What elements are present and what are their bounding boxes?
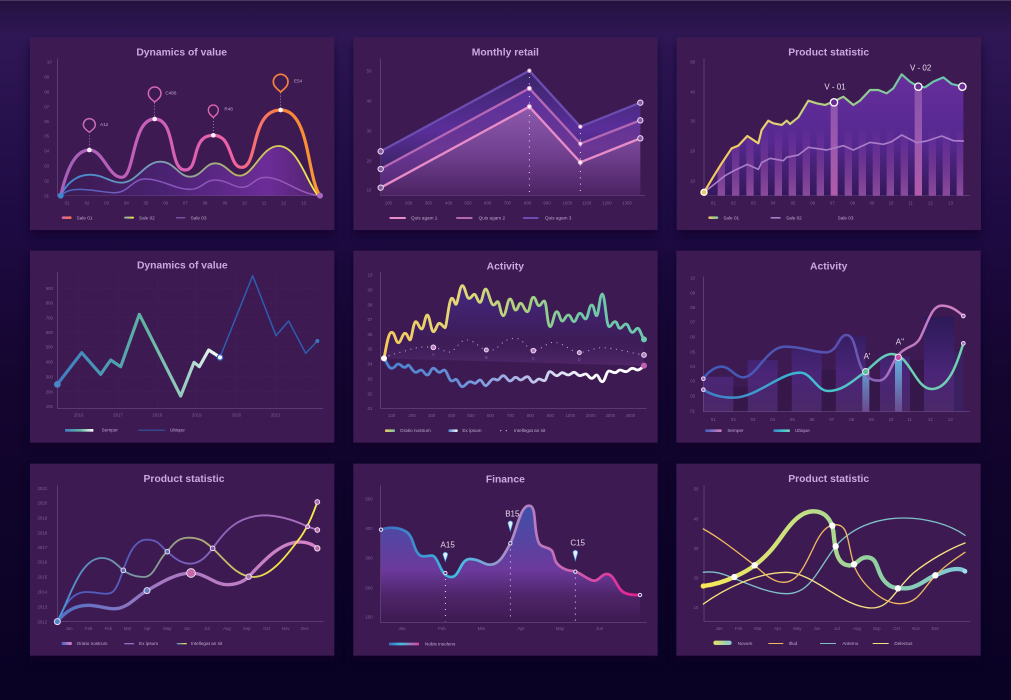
pin A12: A12 <box>100 122 109 127</box>
axes: 06 <box>690 334 696 339</box>
axes: 2020 <box>38 501 48 506</box>
callouts: C15 <box>570 538 586 547</box>
axes <box>690 275 970 422</box>
legend <box>65 428 185 433</box>
legend: Intellegat an sit <box>514 428 546 433</box>
legend: Ex ipsum <box>462 428 482 433</box>
point labels: D <box>578 357 581 362</box>
axes: 40 <box>367 99 372 104</box>
panel: product statistic, curves <box>30 464 334 661</box>
pin E54 <box>273 74 303 112</box>
axes: 12 <box>928 201 933 206</box>
line: intellegat an sit <box>57 502 317 622</box>
axes: Jan <box>66 626 73 631</box>
axes: 800 <box>527 413 535 418</box>
markers <box>54 500 320 625</box>
point labels: C <box>532 356 535 361</box>
axes: 11 <box>908 201 914 206</box>
legend: Intellegat an sit <box>191 641 223 646</box>
axes: Mar <box>124 626 132 631</box>
axes: 600 <box>487 413 495 418</box>
axes: 06 <box>810 201 816 206</box>
axes: 13 <box>948 201 954 206</box>
panel: activity, waves <box>353 251 658 448</box>
callouts <box>441 509 586 549</box>
legend: Sale 01 <box>77 215 93 220</box>
band: series 2 <box>381 88 640 188</box>
legend: Quis agam 2 <box>479 215 505 220</box>
bars <box>703 317 963 412</box>
legend: Ex ipsum <box>139 641 158 646</box>
axes: 10 <box>889 201 894 206</box>
line: sale 02 <box>61 146 318 196</box>
axes: 10 <box>367 188 372 193</box>
legend: Sale 02 <box>786 215 802 220</box>
band: series 3 <box>381 71 640 169</box>
axes: 100 <box>365 615 373 620</box>
axes: 02 <box>690 394 696 399</box>
axes: 13 <box>301 201 307 206</box>
legend: Novum <box>738 641 753 646</box>
axes: 08 <box>690 305 696 310</box>
axes: 01 <box>65 201 70 206</box>
axes: 01 <box>711 417 716 422</box>
axes: 800 <box>46 301 54 306</box>
axes: 10 <box>368 273 373 278</box>
axes: Apr <box>774 626 782 631</box>
line: ubique <box>703 343 963 398</box>
axes: Sep <box>243 626 251 631</box>
heading: Activity <box>810 261 848 272</box>
axes: Aug <box>223 626 231 631</box>
axes: 06 <box>810 417 815 422</box>
legend: Quis agam 3 <box>545 215 572 220</box>
axes: 400 <box>448 413 456 418</box>
axes <box>44 58 322 206</box>
axes: 04 <box>770 417 776 422</box>
legend <box>385 428 546 433</box>
line: antemo <box>703 518 965 594</box>
area chart fill <box>381 506 640 622</box>
legend <box>389 215 572 220</box>
axes: 200 <box>46 389 54 394</box>
axes: 600 <box>46 330 54 335</box>
axes: 12 <box>928 417 933 422</box>
dotted line: intellegat an sit <box>384 338 644 358</box>
markers <box>381 336 647 369</box>
line: ex ipsum <box>57 515 317 622</box>
axes: 03 <box>44 164 50 169</box>
heading: Activity <box>487 261 524 272</box>
axes: 300 <box>365 556 373 561</box>
legend: Ubique <box>170 428 185 433</box>
legend <box>708 215 854 220</box>
legend: Antemo <box>842 641 859 646</box>
axes: 07 <box>829 417 835 422</box>
axes: 08 <box>849 417 855 422</box>
axes: Oct <box>893 626 901 631</box>
axes: 05 <box>790 417 795 422</box>
callouts: A' <box>864 352 871 361</box>
legend: Illud <box>789 641 798 646</box>
axes: 02 <box>44 178 50 183</box>
axes: 2016 <box>38 560 48 565</box>
axes: Jan <box>399 626 406 631</box>
dotted drop lines <box>445 543 575 621</box>
axes: 100 <box>46 404 54 409</box>
panel: product statistic, bars <box>677 37 981 237</box>
axes: 400 <box>46 360 54 365</box>
dotted drop lines <box>529 71 580 194</box>
axes: 700 <box>507 413 515 418</box>
axes: 50 <box>690 59 696 64</box>
heading: Product statistic <box>788 474 869 485</box>
axes: 11 <box>262 201 267 206</box>
line: quis agam 3 <box>381 71 640 151</box>
axes: 100 <box>385 201 393 206</box>
area under sale 02 <box>61 146 318 196</box>
markers <box>701 83 966 195</box>
line: sale 01 <box>61 110 320 196</box>
axes: 30 <box>367 129 372 134</box>
legend <box>389 641 456 646</box>
axes: 01 <box>368 406 373 411</box>
axes: 500 <box>464 201 472 206</box>
axes: Mar <box>478 626 486 631</box>
line: semper <box>57 314 220 396</box>
axes: 06 <box>163 201 169 206</box>
axes <box>368 272 647 418</box>
axes: 600 <box>484 201 492 206</box>
markers <box>701 314 965 391</box>
axes: Jun <box>184 626 191 631</box>
point labels: B <box>485 355 488 360</box>
area between lines <box>384 286 644 366</box>
axes: 2018 <box>38 530 48 535</box>
axes: 900 <box>46 286 54 291</box>
axes: 500 <box>467 413 475 418</box>
callouts: B15 <box>505 509 520 518</box>
axes: Jul <box>204 626 210 631</box>
panel: dynamics of value, line <box>30 251 334 448</box>
axes: May <box>793 626 802 631</box>
axes: 04 <box>124 201 129 206</box>
axes: May <box>163 626 172 631</box>
callouts <box>824 64 932 92</box>
axes: May <box>556 626 565 631</box>
axes <box>46 272 323 417</box>
callouts: V - 02 <box>910 64 932 73</box>
markers <box>701 522 967 591</box>
axes: 400 <box>445 201 453 206</box>
panel: product statistic, thick curve <box>676 464 981 661</box>
axes: 07 <box>183 201 188 206</box>
axes: Jan <box>716 626 723 631</box>
axes: 40 <box>690 89 696 94</box>
line: delectus <box>703 543 965 608</box>
axes: 900 <box>547 413 555 418</box>
axes: 2012 <box>38 619 48 624</box>
legend: Sale 01 <box>723 215 740 220</box>
markers <box>378 69 643 190</box>
axes: 04 <box>690 364 696 369</box>
panel: activity, bars <box>676 251 981 448</box>
legend <box>62 215 207 220</box>
line: illud <box>703 525 965 604</box>
axes: 07 <box>44 104 50 109</box>
legend: Sale 03 <box>191 215 207 220</box>
axes: 40 <box>694 516 699 521</box>
axes: 09 <box>223 201 228 206</box>
axes: Nov <box>912 626 921 631</box>
axes: Mar <box>754 626 762 631</box>
callouts <box>864 338 905 361</box>
axes: 400 <box>365 526 373 531</box>
axes: Jul <box>834 626 840 631</box>
axes: 08 <box>203 201 208 206</box>
axes: 05 <box>368 347 373 352</box>
heading: Dynamics of value <box>137 261 228 272</box>
axes: Dec <box>301 626 310 631</box>
axes: 4000 <box>626 413 636 418</box>
axes: 10 <box>690 178 696 183</box>
axes: Nov <box>282 626 290 631</box>
axes: 02 <box>85 201 90 206</box>
point labels <box>432 352 581 362</box>
axes: 06 <box>368 332 373 337</box>
legend: Sale 02 <box>139 215 155 220</box>
axes: 20 <box>690 148 696 153</box>
axes: 08 <box>44 89 50 94</box>
axes: Sep <box>873 626 881 631</box>
axes: 1300 <box>622 201 632 206</box>
axes: 10 <box>242 201 247 206</box>
line: oratio nostrum <box>57 542 317 622</box>
axes: 2013 <box>38 604 48 609</box>
axes: 200 <box>408 413 416 418</box>
axes <box>367 58 645 206</box>
axes: 2015 <box>38 575 48 580</box>
axes: 2014 <box>38 590 48 595</box>
pins <box>443 521 578 561</box>
axes <box>38 485 323 631</box>
pin A12 <box>83 119 109 152</box>
axes: 12 <box>281 201 287 206</box>
axes: 300 <box>428 413 436 418</box>
area under main line <box>704 74 963 196</box>
line: sale 02 <box>704 135 963 192</box>
callouts: A15 <box>441 540 455 549</box>
axes: 2017 <box>113 412 123 417</box>
axes: 02 <box>731 201 736 206</box>
axes: 11 <box>907 417 913 422</box>
axes: 500 <box>46 344 54 349</box>
end markers <box>58 193 323 199</box>
axes: 02 <box>731 417 736 422</box>
axes: 30 <box>694 546 699 551</box>
legend: Delectus <box>894 641 913 646</box>
axes: 09 <box>368 288 373 293</box>
axes: 09 <box>869 417 874 422</box>
axes: 300 <box>425 201 433 206</box>
axes: 700 <box>46 315 54 320</box>
axes <box>365 485 647 631</box>
legend: Quis agam 1 <box>411 215 438 220</box>
axes: 05 <box>791 201 796 206</box>
axes: 2019 <box>192 412 202 417</box>
axes: 2021 <box>38 486 48 491</box>
axes: 09 <box>44 74 50 79</box>
axes: 10 <box>889 417 894 422</box>
line: quis agam 2 <box>381 88 640 169</box>
legend <box>62 641 223 646</box>
axes: 03 <box>751 417 756 422</box>
axes: 100 <box>388 413 396 418</box>
highlight bars <box>862 357 902 412</box>
line: sale 03 <box>61 177 320 196</box>
axes: 1200 <box>602 201 612 206</box>
panel: dynamics of value, pins <box>30 37 334 237</box>
axes: 1000 <box>563 201 573 206</box>
legend: Oratio nostrum <box>400 428 431 433</box>
legend: Ubique <box>795 428 810 433</box>
line: novum <box>703 511 965 588</box>
axes: 03 <box>368 376 373 381</box>
axes: 03 <box>690 379 696 384</box>
axes: 08 <box>850 201 856 206</box>
legend: Sale 03 <box>838 215 854 220</box>
pin R48 <box>208 105 233 138</box>
area: series 1 <box>381 107 640 196</box>
panel: finance <box>353 464 658 661</box>
markers <box>54 339 319 388</box>
axes: 200 <box>365 585 373 590</box>
axes: 04 <box>368 362 373 367</box>
axes <box>694 485 970 631</box>
axes: 2020 <box>232 412 242 417</box>
legend: Oratio nostrum <box>77 641 108 646</box>
axes: 06 <box>44 119 50 124</box>
axes: 04 <box>44 149 50 154</box>
axes: 09 <box>870 201 875 206</box>
axes: 2016 <box>74 412 84 417</box>
axes: 07 <box>830 201 835 206</box>
axes <box>690 58 970 206</box>
axes: 1100 <box>582 201 592 206</box>
axes: 300 <box>46 374 54 379</box>
legend <box>705 428 810 433</box>
axes: 10 <box>694 605 699 610</box>
axes: Apr <box>144 626 151 631</box>
axes: 3000 <box>606 413 616 418</box>
legend: Semper <box>102 428 118 433</box>
axes: 900 <box>543 201 551 206</box>
markers <box>379 528 642 597</box>
axes: Jun <box>596 626 604 631</box>
line: oratio nostrum <box>384 286 644 358</box>
line: quis agam 1 <box>381 107 640 188</box>
axes: 700 <box>504 201 512 206</box>
axes: 01 <box>44 193 50 198</box>
axes: 05 <box>690 349 696 354</box>
pin C486: C486 <box>165 90 177 95</box>
axes: 10 <box>47 59 52 64</box>
legend <box>713 641 913 646</box>
heading: Product statistic <box>144 474 225 485</box>
axes: 08 <box>368 303 373 308</box>
axes: 2018 <box>153 412 163 417</box>
axes: Dec <box>931 626 940 631</box>
axes: 2021 <box>271 412 281 417</box>
axes: 01 <box>711 201 716 206</box>
vertical bars <box>718 87 964 196</box>
axes: 30 <box>690 119 696 124</box>
axes: Oct <box>263 626 271 631</box>
axes: 800 <box>524 201 532 206</box>
axes: 04 <box>771 201 776 206</box>
axes: Jun <box>814 626 821 631</box>
axes: 03 <box>751 201 756 206</box>
line: ex ipsum <box>384 358 644 387</box>
legend: Nobis insolens <box>425 641 456 646</box>
panel: monthly retail <box>353 37 658 237</box>
axes: Feb <box>105 626 113 631</box>
axes: 50 <box>694 486 699 491</box>
axes: 200 <box>405 201 413 206</box>
axes: 1000 <box>566 413 576 418</box>
axes: 10 <box>690 275 696 280</box>
line: nobis insolens <box>381 506 640 595</box>
line: semper <box>703 306 963 381</box>
axes: 07 <box>368 317 373 322</box>
point labels: A <box>432 352 435 357</box>
axes: 2019 <box>38 516 48 521</box>
callouts: V - 01 <box>824 83 846 92</box>
line: ubique <box>220 276 317 357</box>
axes: Feb <box>735 626 743 631</box>
axes: 09 <box>690 290 696 295</box>
axes: 500 <box>365 496 373 501</box>
legend: Semper <box>727 428 744 433</box>
pin E54: E54 <box>294 79 303 84</box>
axes: 20 <box>367 158 372 163</box>
axes: Aug <box>853 626 861 631</box>
callouts: A'' <box>896 338 905 347</box>
heading: Finance <box>486 474 525 485</box>
axes: 50 <box>367 69 372 74</box>
axes: 01 <box>690 408 696 413</box>
axes: 05 <box>44 134 50 139</box>
axes: 13 <box>948 417 953 422</box>
axes: Feb <box>438 626 446 631</box>
axes: Feb <box>85 626 93 631</box>
axes: 20 <box>694 575 699 580</box>
line: sale 01 <box>704 74 963 192</box>
axes: 05 <box>144 201 149 206</box>
pin R48: R48 <box>224 107 233 112</box>
axes: 2017 <box>38 545 48 550</box>
axes: 03 <box>104 201 110 206</box>
heading: Product statistic <box>788 48 869 59</box>
axes: 02 <box>368 391 373 396</box>
heading: Dynamics of value <box>136 48 227 59</box>
axes: 2000 <box>586 413 596 418</box>
axes: 07 <box>690 320 696 325</box>
heading: Monthly retail <box>472 48 539 59</box>
pin C486 <box>148 87 177 121</box>
axes: Apr <box>518 626 525 631</box>
